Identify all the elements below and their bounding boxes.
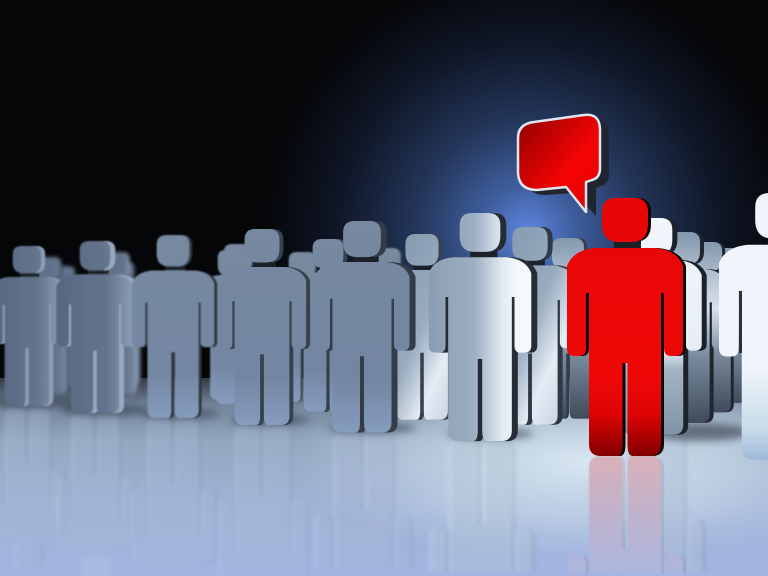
figure: centre grey bbox=[314, 221, 416, 433]
figure: red speaker bbox=[567, 198, 686, 456]
figure: far left bbox=[0, 246, 67, 406]
figure: behind tall grey bbox=[380, 234, 468, 420]
figure: mid back right bbox=[289, 239, 371, 412]
figure: behind red left bbox=[486, 227, 579, 425]
red figure reflection bbox=[567, 456, 686, 574]
bubble depth bbox=[526, 120, 609, 216]
blue spotlight bbox=[240, 0, 768, 440]
reflective floor bbox=[0, 378, 768, 576]
figure: left centre bbox=[132, 235, 217, 418]
figure: white foreground right bbox=[719, 193, 768, 460]
floor reflections of the crowd bbox=[0, 408, 706, 576]
figures: right rear row bbox=[640, 232, 763, 423]
figure: mid left bbox=[218, 229, 310, 425]
figure: left dark bbox=[56, 241, 139, 413]
bubble face bbox=[518, 115, 600, 212]
contact shadows on the floor bbox=[0, 396, 750, 441]
figure: behind red left far bbox=[527, 238, 612, 419]
back row figures bbox=[17, 244, 424, 408]
figure: white behind red bbox=[604, 218, 707, 435]
figure: lit grey to white bbox=[429, 213, 537, 441]
speech bubble bbox=[518, 115, 609, 216]
